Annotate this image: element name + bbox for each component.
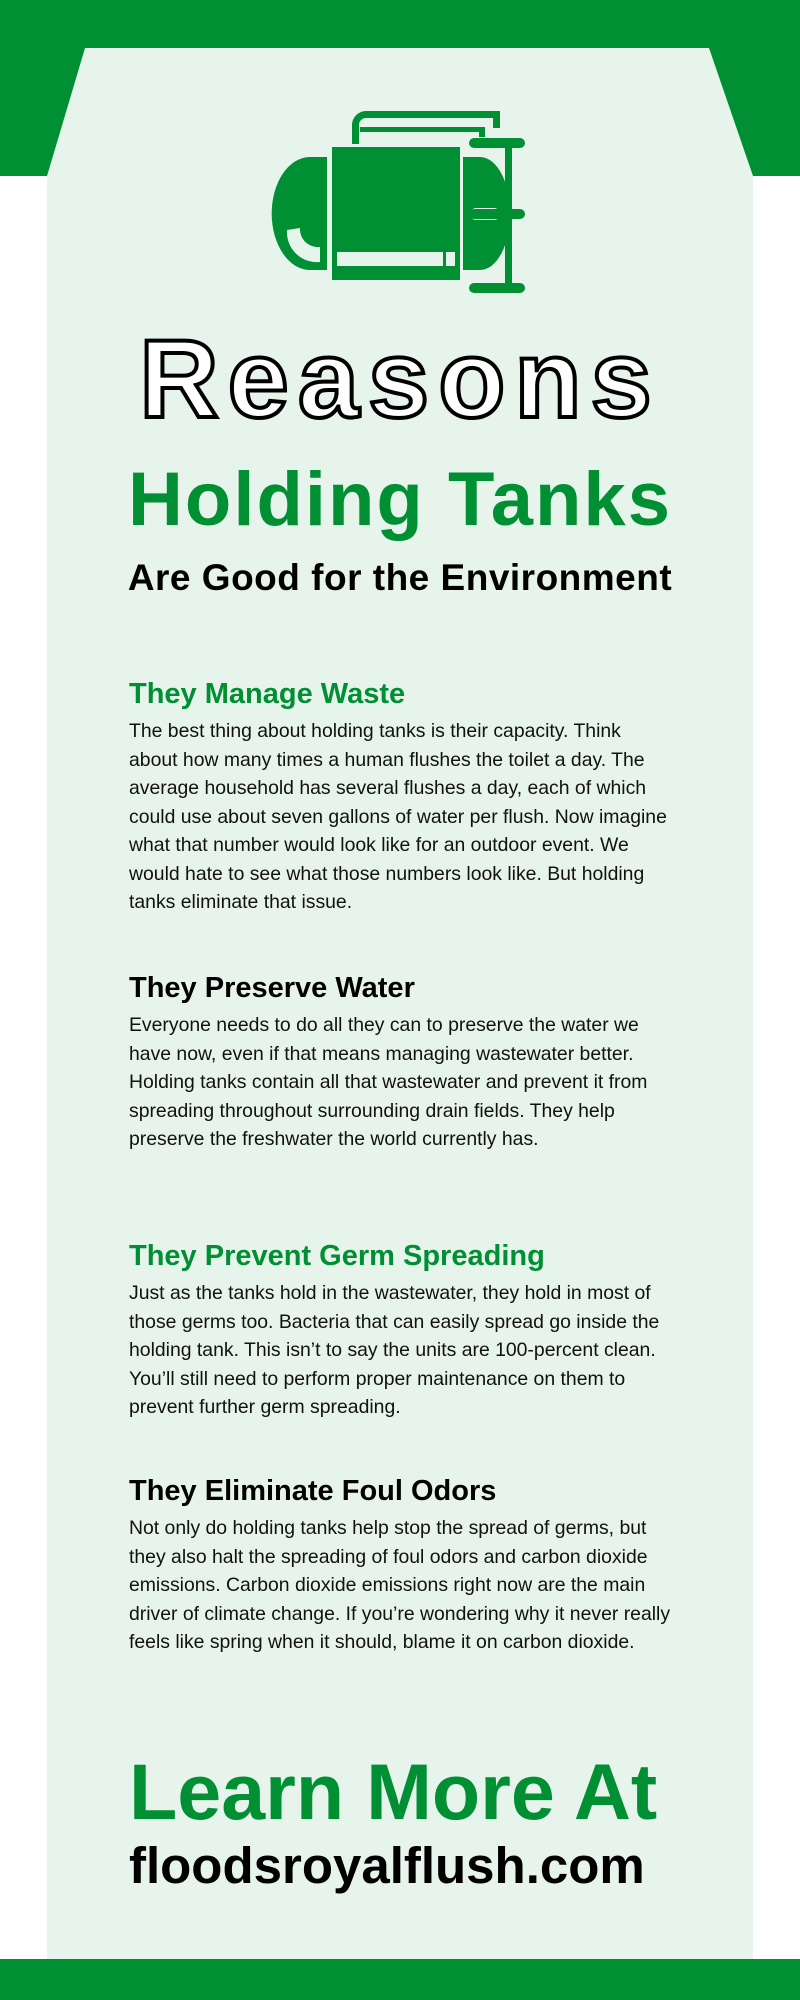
section 3 body: Just as the tanks hold in the wastewater, they hold in most of those germs too. Bacteria that can easily spread go inside the holding tank. This isn’t to say the units are 100-percent clean. You’ll still need to perform proper maintenance on them to prevent further germ spreading. — [129, 1282, 659, 1418]
title: Holding Tanks: Holding Tanks — [128, 457, 672, 542]
section 2 body: Everyone needs to do all they can to preserve the water we have now, even if that means managing wastewater better. Holding tanks contain all that wastewater and prevent it from spreading throughout surrounding drain fields. They help preserve the freshwater the world currently has. — [129, 1014, 647, 1150]
cta: Learn More At: Learn More At — [129, 1747, 657, 1836]
section 4 heading: They Eliminate Foul Odors — [129, 1475, 496, 1507]
section 2 heading: They Preserve Water — [129, 972, 415, 1004]
section 4 body: Not only do holding tanks help stop the spread of germs, but they also halt the spreading of foul odors and carbon dioxide emissions. Carbon dioxide emissions right now are the main driver of climate change. If you’re wondering why it never really feels like spring when it should, blame it on carbon dioxide. — [129, 1517, 670, 1653]
icon: holding tank — [272, 111, 525, 293]
subtitle: Are Good for the Environment — [128, 557, 672, 598]
cta: website: floodsroyalflush.com — [129, 1837, 645, 1894]
section 1 body: The best thing about holding tanks is their capacity. Think about how many times a human flushes the toilet a day. The average household has several flushes a day, each of which could use about seven gallons of water per flush. Now imagine what that number would look like for an outdoor event. We would hate to see what those numbers look like. But holding tanks eliminate that issue. — [129, 720, 667, 913]
section 3 heading: They Prevent Germ Spreading — [129, 1240, 545, 1272]
section 1 heading: They Manage Waste — [129, 678, 405, 710]
title: Reasons: Reasons — [139, 318, 661, 441]
